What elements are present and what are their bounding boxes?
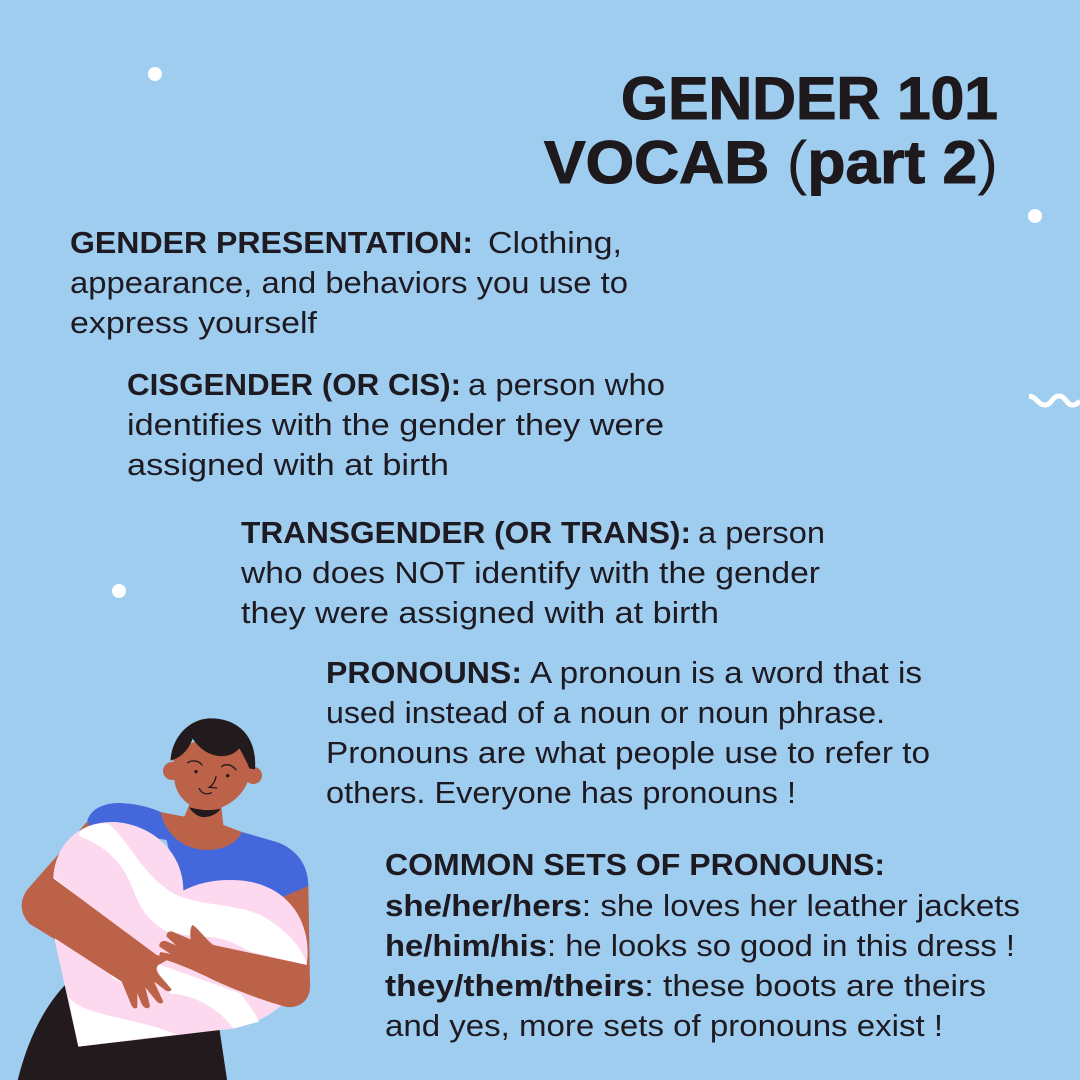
text block: transgender (240, 515, 825, 630)
text block: gender presentation (70, 225, 628, 340)
face (173, 740, 250, 810)
text block: gender presentation: Clothing, (488, 225, 622, 260)
text block: common sets of pronouns: COMMON SETS OF PRONOUNS: (385, 847, 885, 882)
ears (163, 762, 262, 784)
white stripes (53, 823, 307, 1047)
text block: common sets of pronouns: he/him/his : he looks so good in this dress ! (385, 928, 1015, 963)
text block: gender presentation: appearance, and behaviors you use to (70, 265, 628, 300)
beard (189, 807, 221, 817)
text block: cisgender (127, 367, 665, 482)
upper arms (22, 818, 310, 987)
text block: cisgender: a person who (468, 367, 665, 402)
text block: pronouns: others. Everyone has pronouns ! (326, 775, 796, 810)
text block: transgender: TRANSGENDER (OR TRANS): (241, 515, 691, 550)
neck and chest (160, 802, 242, 860)
hair (171, 718, 255, 769)
text block: pronouns: PRONOUNS: (326, 655, 522, 690)
text block: common sets of pronouns: they/them/theirs : these boots are theirs (385, 968, 986, 1003)
head (163, 718, 262, 817)
decorative white dots and squiggle (112, 67, 1080, 598)
skirt (17, 985, 227, 1080)
text block: transgender: who does NOT identify with the gender (240, 555, 820, 590)
eyes, brows, nose and mouth (188, 761, 236, 794)
text block: gender presentation: GENDER PRESENTATION: (70, 225, 473, 260)
text block: common sets of pronouns (385, 847, 1020, 1043)
text block: pronouns (326, 655, 930, 810)
text block: cisgender: identifies with the gender they were (127, 407, 664, 442)
text block: common sets of pronouns: and yes, more sets of pronouns exist ! (385, 1008, 943, 1043)
text block: cisgender: CISGENDER (OR CIS): (127, 367, 461, 402)
text block: pronouns: used instead of a noun or noun phrase. (326, 695, 885, 730)
illustration: person hugging a heart (17, 718, 310, 1080)
title: GENDER 101 (621, 65, 998, 132)
text block: pronouns: A pronoun is a word that is (530, 655, 922, 690)
forearm and hand: left (22, 878, 172, 1008)
heart base (53, 822, 308, 1047)
text block: common sets of pronouns: she/her/hers : she loves her leather jackets (385, 888, 1020, 923)
text block: transgender: a person (698, 515, 825, 550)
text block: cisgender: assigned with at birth (127, 447, 449, 482)
title: VOCAB (part 2) (544, 129, 998, 196)
forearm and hand: right (159, 925, 310, 1007)
heart (53, 822, 308, 1047)
shirt (87, 803, 308, 900)
text block: transgender: they were assigned with at birth (241, 595, 719, 630)
text block: pronouns: Pronouns are what people use to refer to (326, 735, 930, 770)
title (544, 65, 998, 196)
text block: gender presentation: express yourself (70, 305, 317, 340)
